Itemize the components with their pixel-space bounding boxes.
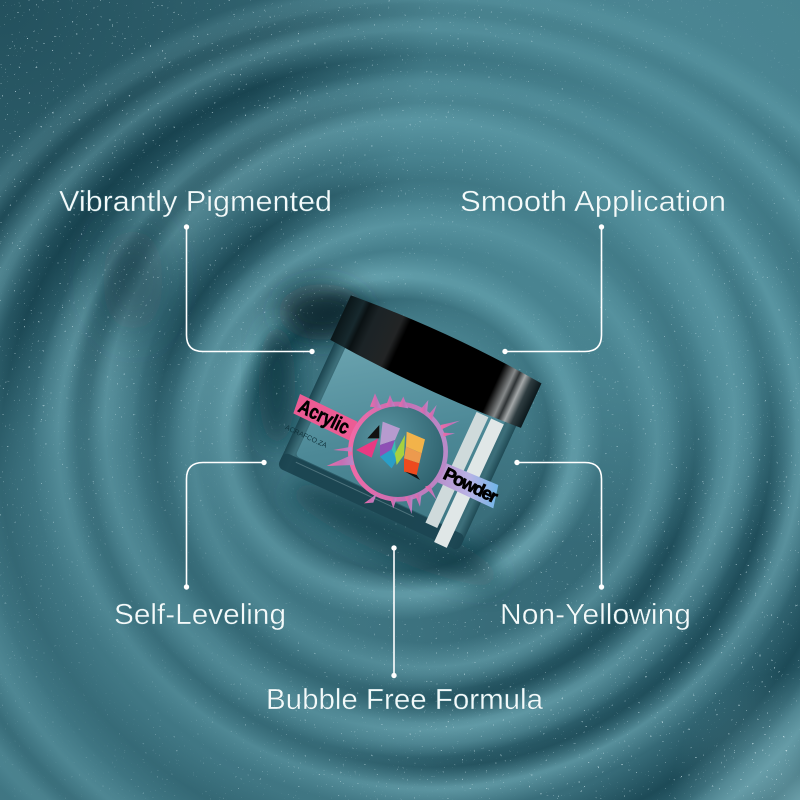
callout: Vibrantly Pigmented — [59, 186, 332, 354]
callout: Non-Yellowing — [500, 460, 691, 631]
jar — [268, 290, 543, 555]
white label stripes — [420, 412, 504, 548]
callout: Smooth Application: Smooth Application — [460, 186, 726, 218]
jar glass body — [268, 290, 543, 555]
callout: Bubble Free Formula — [266, 545, 544, 716]
powder label text: Powder — [440, 464, 501, 507]
callout: Bubble Free Formula: Bubble Free Formula — [266, 684, 544, 716]
website text: ACRAFCO.ZA — [284, 424, 328, 450]
callout: Self-Leveling: Self-Leveling — [114, 599, 286, 631]
acrylic label text: Acrylic — [295, 396, 353, 439]
jar lid — [329, 291, 543, 432]
paint splash ring logo — [293, 393, 498, 514]
jar shadows — [103, 225, 509, 602]
pink label band — [293, 394, 357, 442]
callout: Non-Yellowing: Non-Yellowing — [500, 599, 691, 631]
callout: Self-Leveling — [114, 460, 286, 631]
callout: Smooth Application — [460, 186, 726, 354]
colourful logo mark — [356, 422, 425, 480]
callout: Vibrantly Pigmented: Vibrantly Pigmented — [59, 186, 332, 218]
powder label band — [434, 461, 498, 508]
